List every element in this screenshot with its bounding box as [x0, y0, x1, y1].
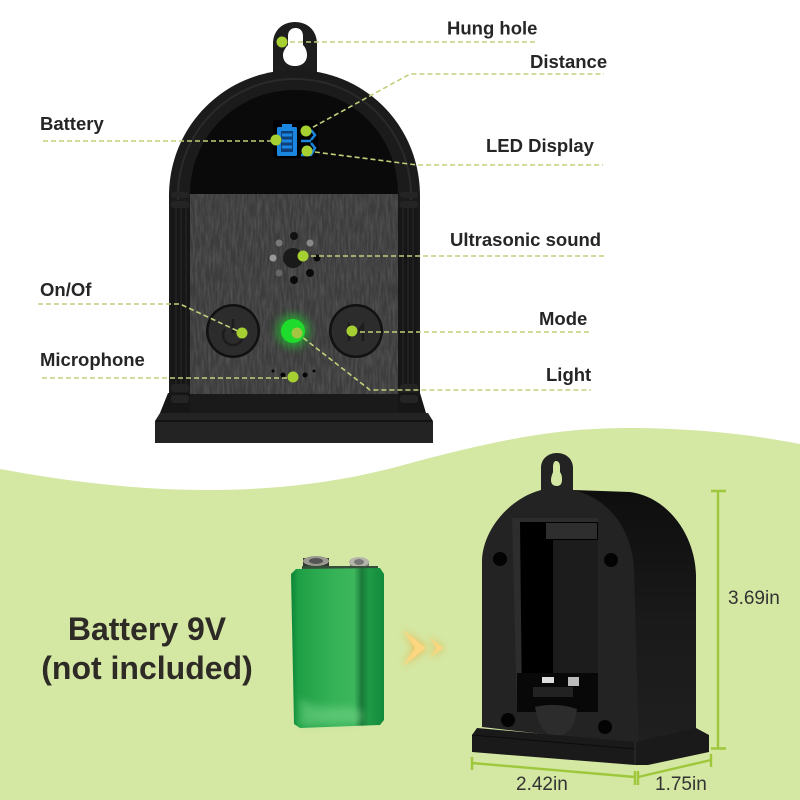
battery highlight	[300, 698, 362, 726]
screw holes	[493, 552, 618, 734]
callout: Distance: Distance	[530, 51, 607, 72]
microphone holes	[272, 370, 316, 378]
dimension: width 2.42in	[472, 757, 635, 795]
dimension: depth 1.75in: 1.75in	[655, 774, 707, 795]
callout: On/Of	[38, 279, 248, 338]
callout: Mode	[346, 308, 590, 336]
icon: 9V battery	[291, 556, 384, 728]
battery body	[291, 568, 384, 728]
battery compartment	[512, 518, 598, 737]
callout: Ultrasonic sound: Ultrasonic sound	[450, 229, 601, 250]
callout: Battery	[40, 113, 282, 146]
right column	[398, 192, 418, 386]
front view device	[155, 22, 433, 443]
callout: LED Display: LED Display	[486, 135, 595, 156]
dimension: depth 1.75in	[638, 754, 711, 795]
dimension: height 3.69in: 3.69in	[728, 588, 780, 609]
callout: Hung hole	[276, 18, 537, 48]
side shell	[573, 490, 696, 762]
callout: Ultrasonic sound	[298, 229, 605, 262]
battery note text: (not included)	[41, 650, 253, 686]
arrow chevrons	[403, 630, 443, 666]
dimension: height 3.69in	[711, 490, 780, 749]
arch mouldings	[178, 79, 411, 200]
device body	[169, 70, 420, 412]
wood panel	[190, 194, 398, 394]
green indicator light	[276, 314, 310, 348]
black display panel	[190, 90, 398, 194]
keyhole	[551, 461, 562, 486]
ultrasonic speaker	[270, 232, 320, 284]
callout: LED Display	[302, 135, 603, 165]
battery terminals	[302, 556, 378, 574]
callout: Microphone: Microphone	[40, 349, 145, 370]
rear base	[472, 728, 709, 765]
green background panel	[0, 428, 800, 800]
left column	[171, 192, 190, 386]
dimension: width 2.42in: 2.42in	[516, 774, 568, 795]
hanging tab	[273, 22, 317, 72]
mode button	[329, 304, 383, 358]
battery note text: Battery 9V	[68, 611, 227, 647]
callout: Battery: Battery	[40, 113, 104, 134]
power button	[206, 304, 260, 358]
rear face	[482, 453, 639, 745]
LED display	[273, 120, 318, 158]
callout: Distance	[300, 51, 607, 136]
callout: Light: Light	[546, 364, 591, 385]
callout: On/Of: On/Of	[40, 279, 92, 300]
callout: Mode: Mode	[539, 308, 587, 329]
battery note text	[41, 611, 253, 686]
callout: Light	[292, 328, 591, 390]
callout: Microphone	[40, 349, 298, 382]
callout: Hung hole: Hung hole	[447, 18, 537, 38]
device base	[155, 384, 433, 443]
device rear view	[472, 453, 709, 765]
